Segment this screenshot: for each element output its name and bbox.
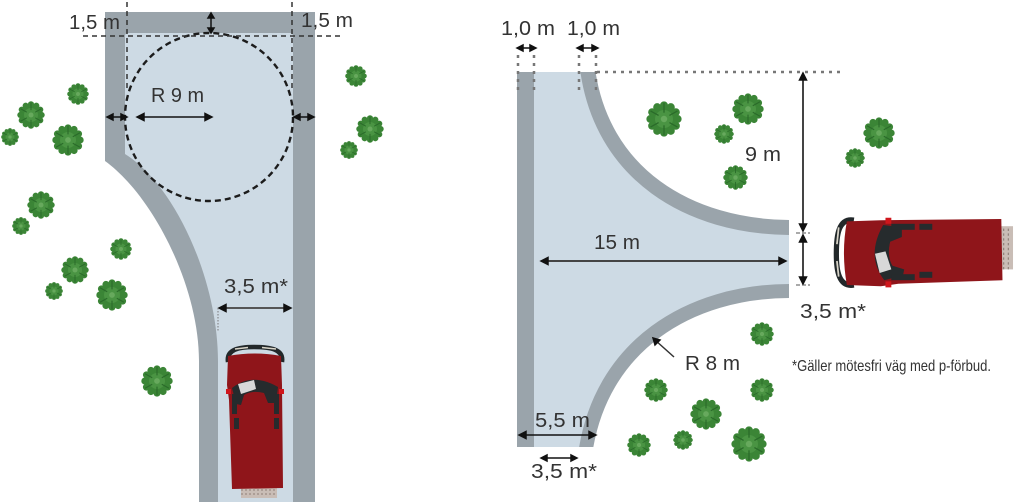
trees left layout [1,65,384,397]
label: 9 m: 9 m [745,144,781,166]
panel: turning circle road layout [69,2,353,502]
van: left road [226,347,284,498]
panel: T-junction road layout [501,18,1013,483]
arrows left layout [107,13,314,332]
label: 3,5 m left road: 3,5 m* [224,276,288,298]
label: 5,5 m: 5,5 m [535,410,590,432]
arrows right layout [517,45,810,461]
road shoulder [105,12,315,502]
label: 15 m: 15 m [594,232,640,254]
dashed guide lines [83,2,342,92]
shoulders [526,65,790,455]
label: 1,5 m right: 1,5 m [301,10,353,32]
trees right layout [627,93,895,462]
label: 1,5 m left: 1,5 m [69,12,120,34]
label: R 8 m: R 8 m [685,353,740,375]
dotted guide lines [518,55,842,90]
label: R 9 m: R 9 m [151,85,204,107]
label: 3,5 m bottom: 3,5 m* [531,461,597,483]
label: 1,0 m second: 1,0 m [567,18,620,40]
label: 3,5 m right road: 3,5 m* [800,301,866,323]
label: 1,0 m first: 1,0 m [501,18,555,40]
road surface [517,72,789,447]
van: right road [836,218,1013,287]
turning circle R 9 m [125,33,293,201]
road surface [125,33,293,502]
